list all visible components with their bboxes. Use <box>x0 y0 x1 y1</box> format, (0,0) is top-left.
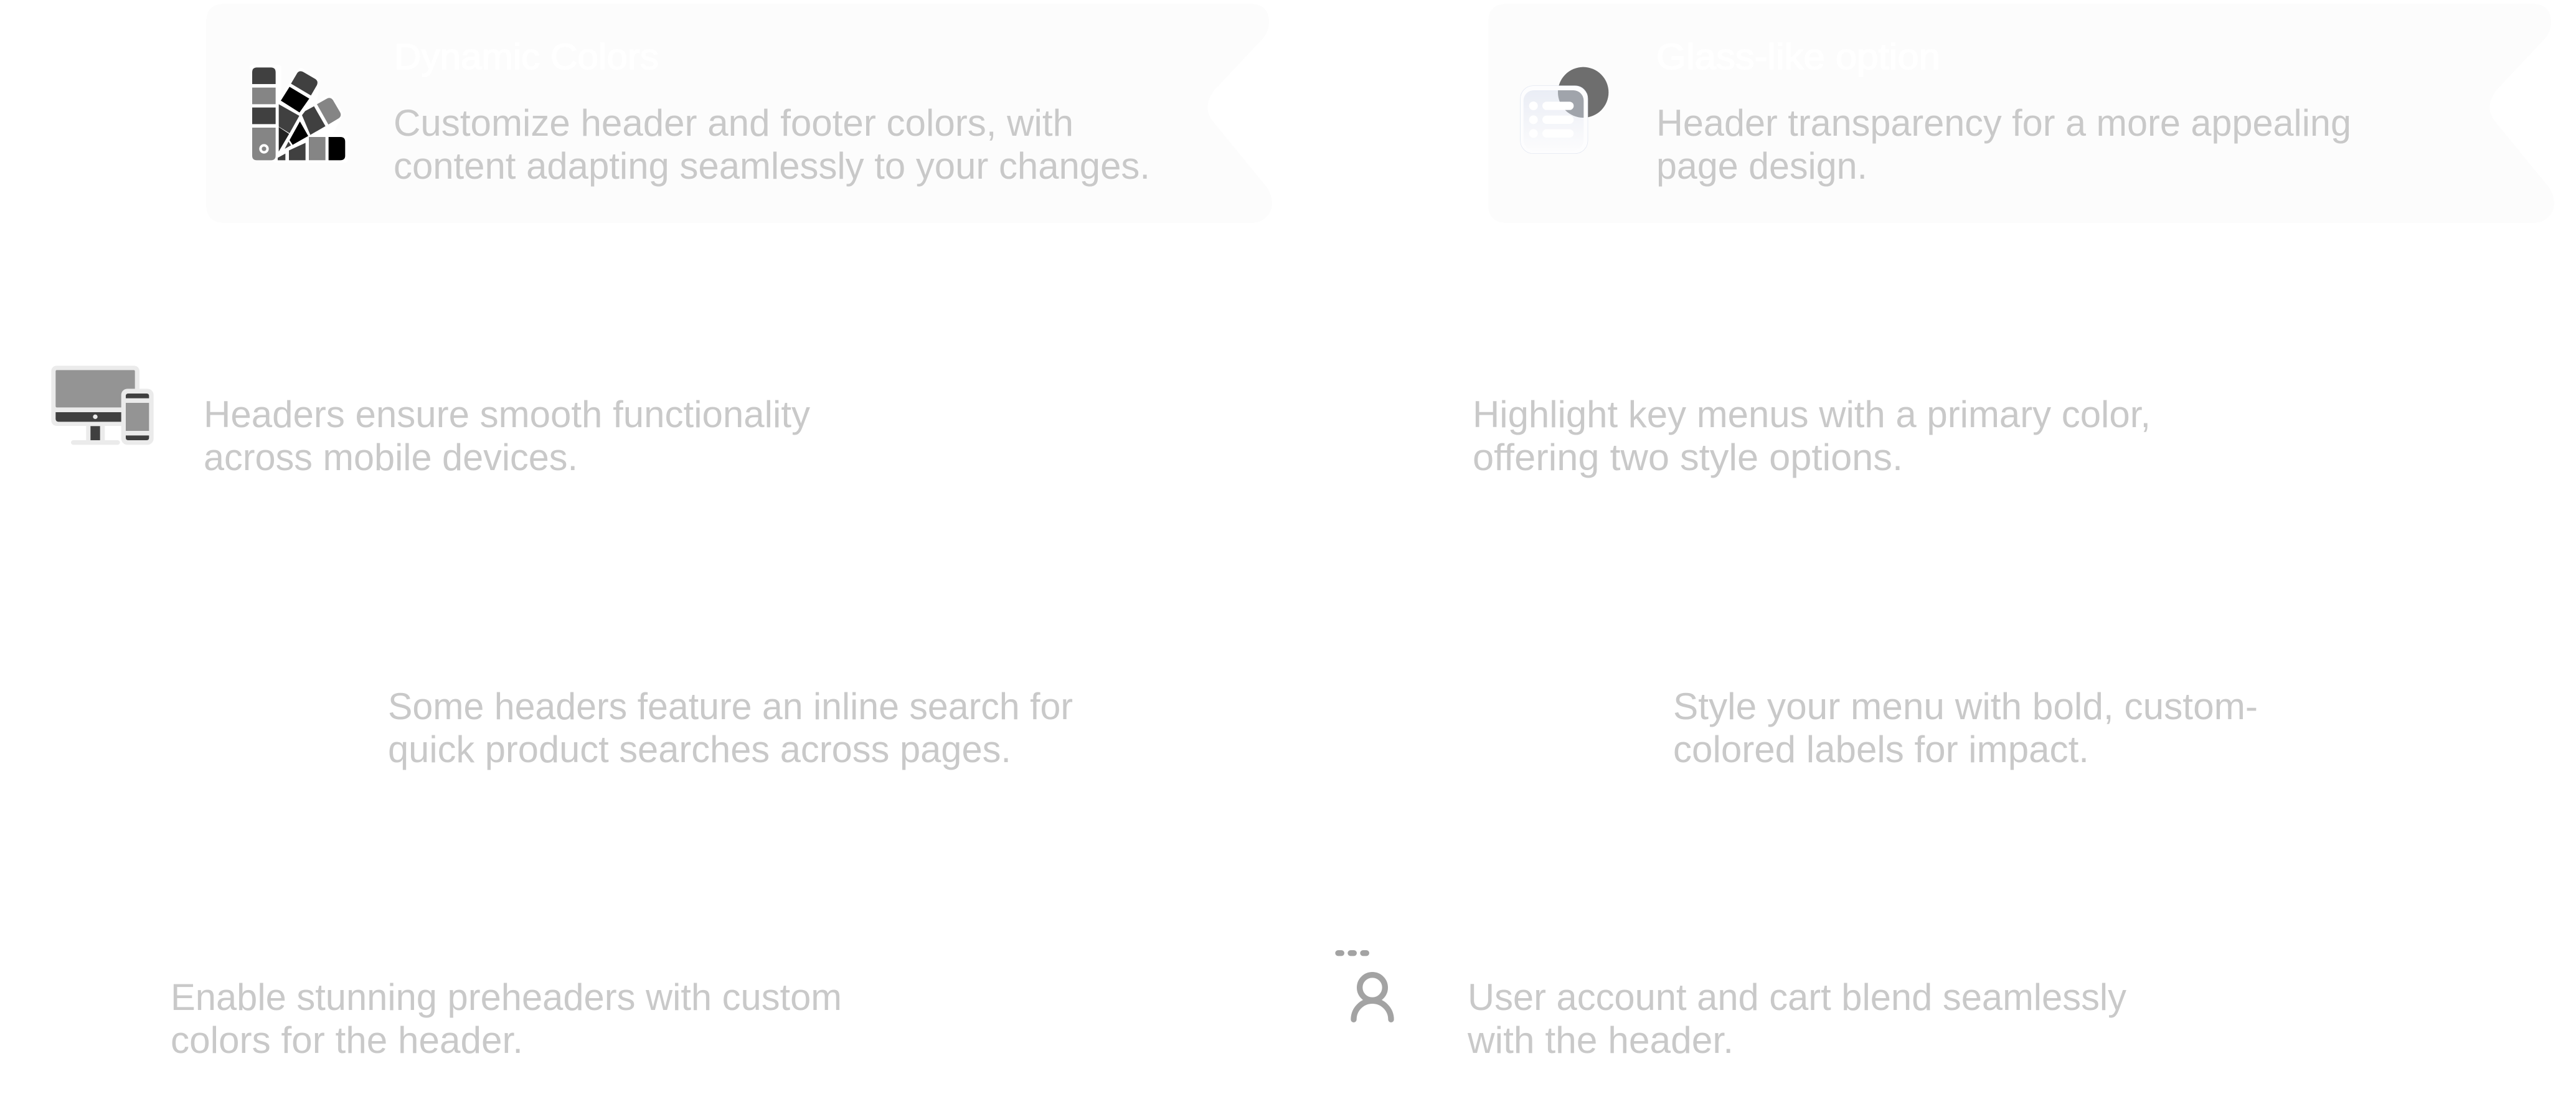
text: inline search description: Some headers feature an inline search for <box>388 686 1073 727</box>
panel: dynamic colors <box>206 4 1272 223</box>
text: user account description: User account and cart blend seamlessly <box>1468 976 2126 1018</box>
text: inline search description: quick product searches across pages. <box>388 729 1011 770</box>
feature: primary color menus <box>1473 394 2151 478</box>
feature: inline search <box>388 686 1073 770</box>
icon: color swatch fan <box>252 67 345 160</box>
text: mobile devices description <box>204 394 810 478</box>
text: preheaders description: colors for the header. <box>171 1019 523 1061</box>
text: custom menu labels description: Style your menu with bold, custom- <box>1673 686 2258 727</box>
icon: user account with dots <box>1335 950 1391 1019</box>
heading: dynamic colors: Dynamic Colors <box>394 37 659 77</box>
text: preheaders description: Enable stunning preheaders with custom <box>171 976 842 1018</box>
text: mobile devices description: across mobile devices. <box>204 436 578 478</box>
feature: preheaders <box>171 976 842 1061</box>
text: mobile devices description: Headers ensure smooth functionality <box>204 394 810 435</box>
text: custom menu labels description <box>1673 686 2258 770</box>
text: dynamic colors description: content adapting seamlessly to your changes. <box>394 145 1150 187</box>
text: primary color menus description: offering two style options. <box>1473 436 1903 478</box>
text: preheaders description <box>171 976 842 1061</box>
icon: desktop and phone <box>51 366 154 445</box>
text: custom menu labels description: colored labels for impact. <box>1673 729 2089 770</box>
panel: glass-like option <box>1520 67 2349 187</box>
text: inline search description <box>388 686 1073 770</box>
text: glass-like option description: Header transparency for a more appealing <box>1656 102 2351 144</box>
feature: custom menu labels <box>1673 686 2258 770</box>
feature: mobile devices <box>51 366 810 478</box>
text: user account description <box>1467 976 2126 1061</box>
text: primary color menus description <box>1473 394 2151 478</box>
text: glass-like option description <box>1656 102 2351 187</box>
text: dynamic colors description <box>394 102 1150 187</box>
text: dynamic colors description: Customize header and footer colors, with <box>394 102 1073 144</box>
card background: dynamic colors <box>206 4 1272 223</box>
heading: glass-like option: Glass-like option <box>1656 37 1940 77</box>
card background: glass-like option <box>1488 4 2554 223</box>
text: user account description: with the header. <box>1467 1019 1734 1061</box>
text: glass-like option description: page design. <box>1656 145 1867 187</box>
feature: user account and cart <box>1335 950 2126 1061</box>
icon: glass list <box>1521 67 1608 154</box>
text: primary color menus description: Highlight key menus with a primary color, <box>1473 394 2151 435</box>
